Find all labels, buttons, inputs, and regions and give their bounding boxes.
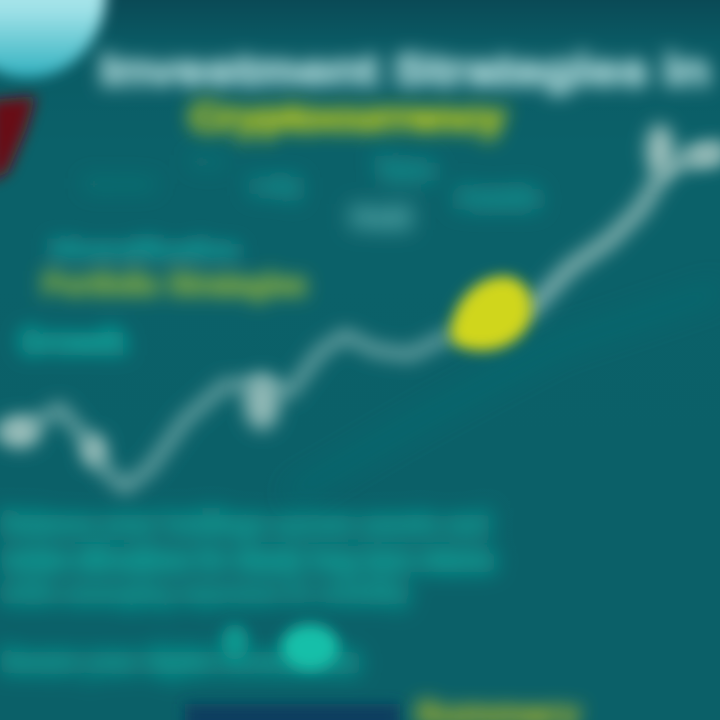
lower text block [0, 505, 495, 680]
bottom dark band [185, 704, 400, 720]
intro text row: Hold [350, 199, 412, 235]
lower text block: Balance your holdings across assets and [0, 505, 490, 541]
left heading block [18, 234, 307, 363]
left heading block: Growth [18, 321, 128, 363]
left heading block: Diversification [50, 234, 240, 264]
intro text row [85, 151, 540, 235]
lower text block: Secure your digital investments [0, 642, 360, 680]
icon: bright teal dot [281, 624, 339, 670]
intro text row: Risk [190, 152, 226, 172]
chart line: right section [530, 150, 720, 310]
chart markers [0, 124, 720, 466]
intro text row: Long [250, 168, 300, 201]
left heading block: Portfolio Strategies [42, 266, 307, 302]
chart line: left section [0, 335, 450, 488]
lower text block: while managing exposure to volatility [0, 577, 410, 608]
icon: yellow coin [450, 276, 532, 351]
icon: dark red shape [0, 96, 36, 182]
intro text row: Term [375, 151, 435, 187]
intro text row: Assets [455, 178, 540, 216]
title: Investment Strategies in [100, 46, 710, 95]
icon: small teal marker [221, 624, 249, 660]
lower text block: review allocations for steady long term returns [0, 541, 495, 577]
faint diagonal trend line [290, 290, 720, 495]
subtitle: Cryptocurrency [190, 97, 505, 139]
icon: pale cyan orb [0, 0, 106, 78]
intro text row: Market [85, 174, 155, 194]
